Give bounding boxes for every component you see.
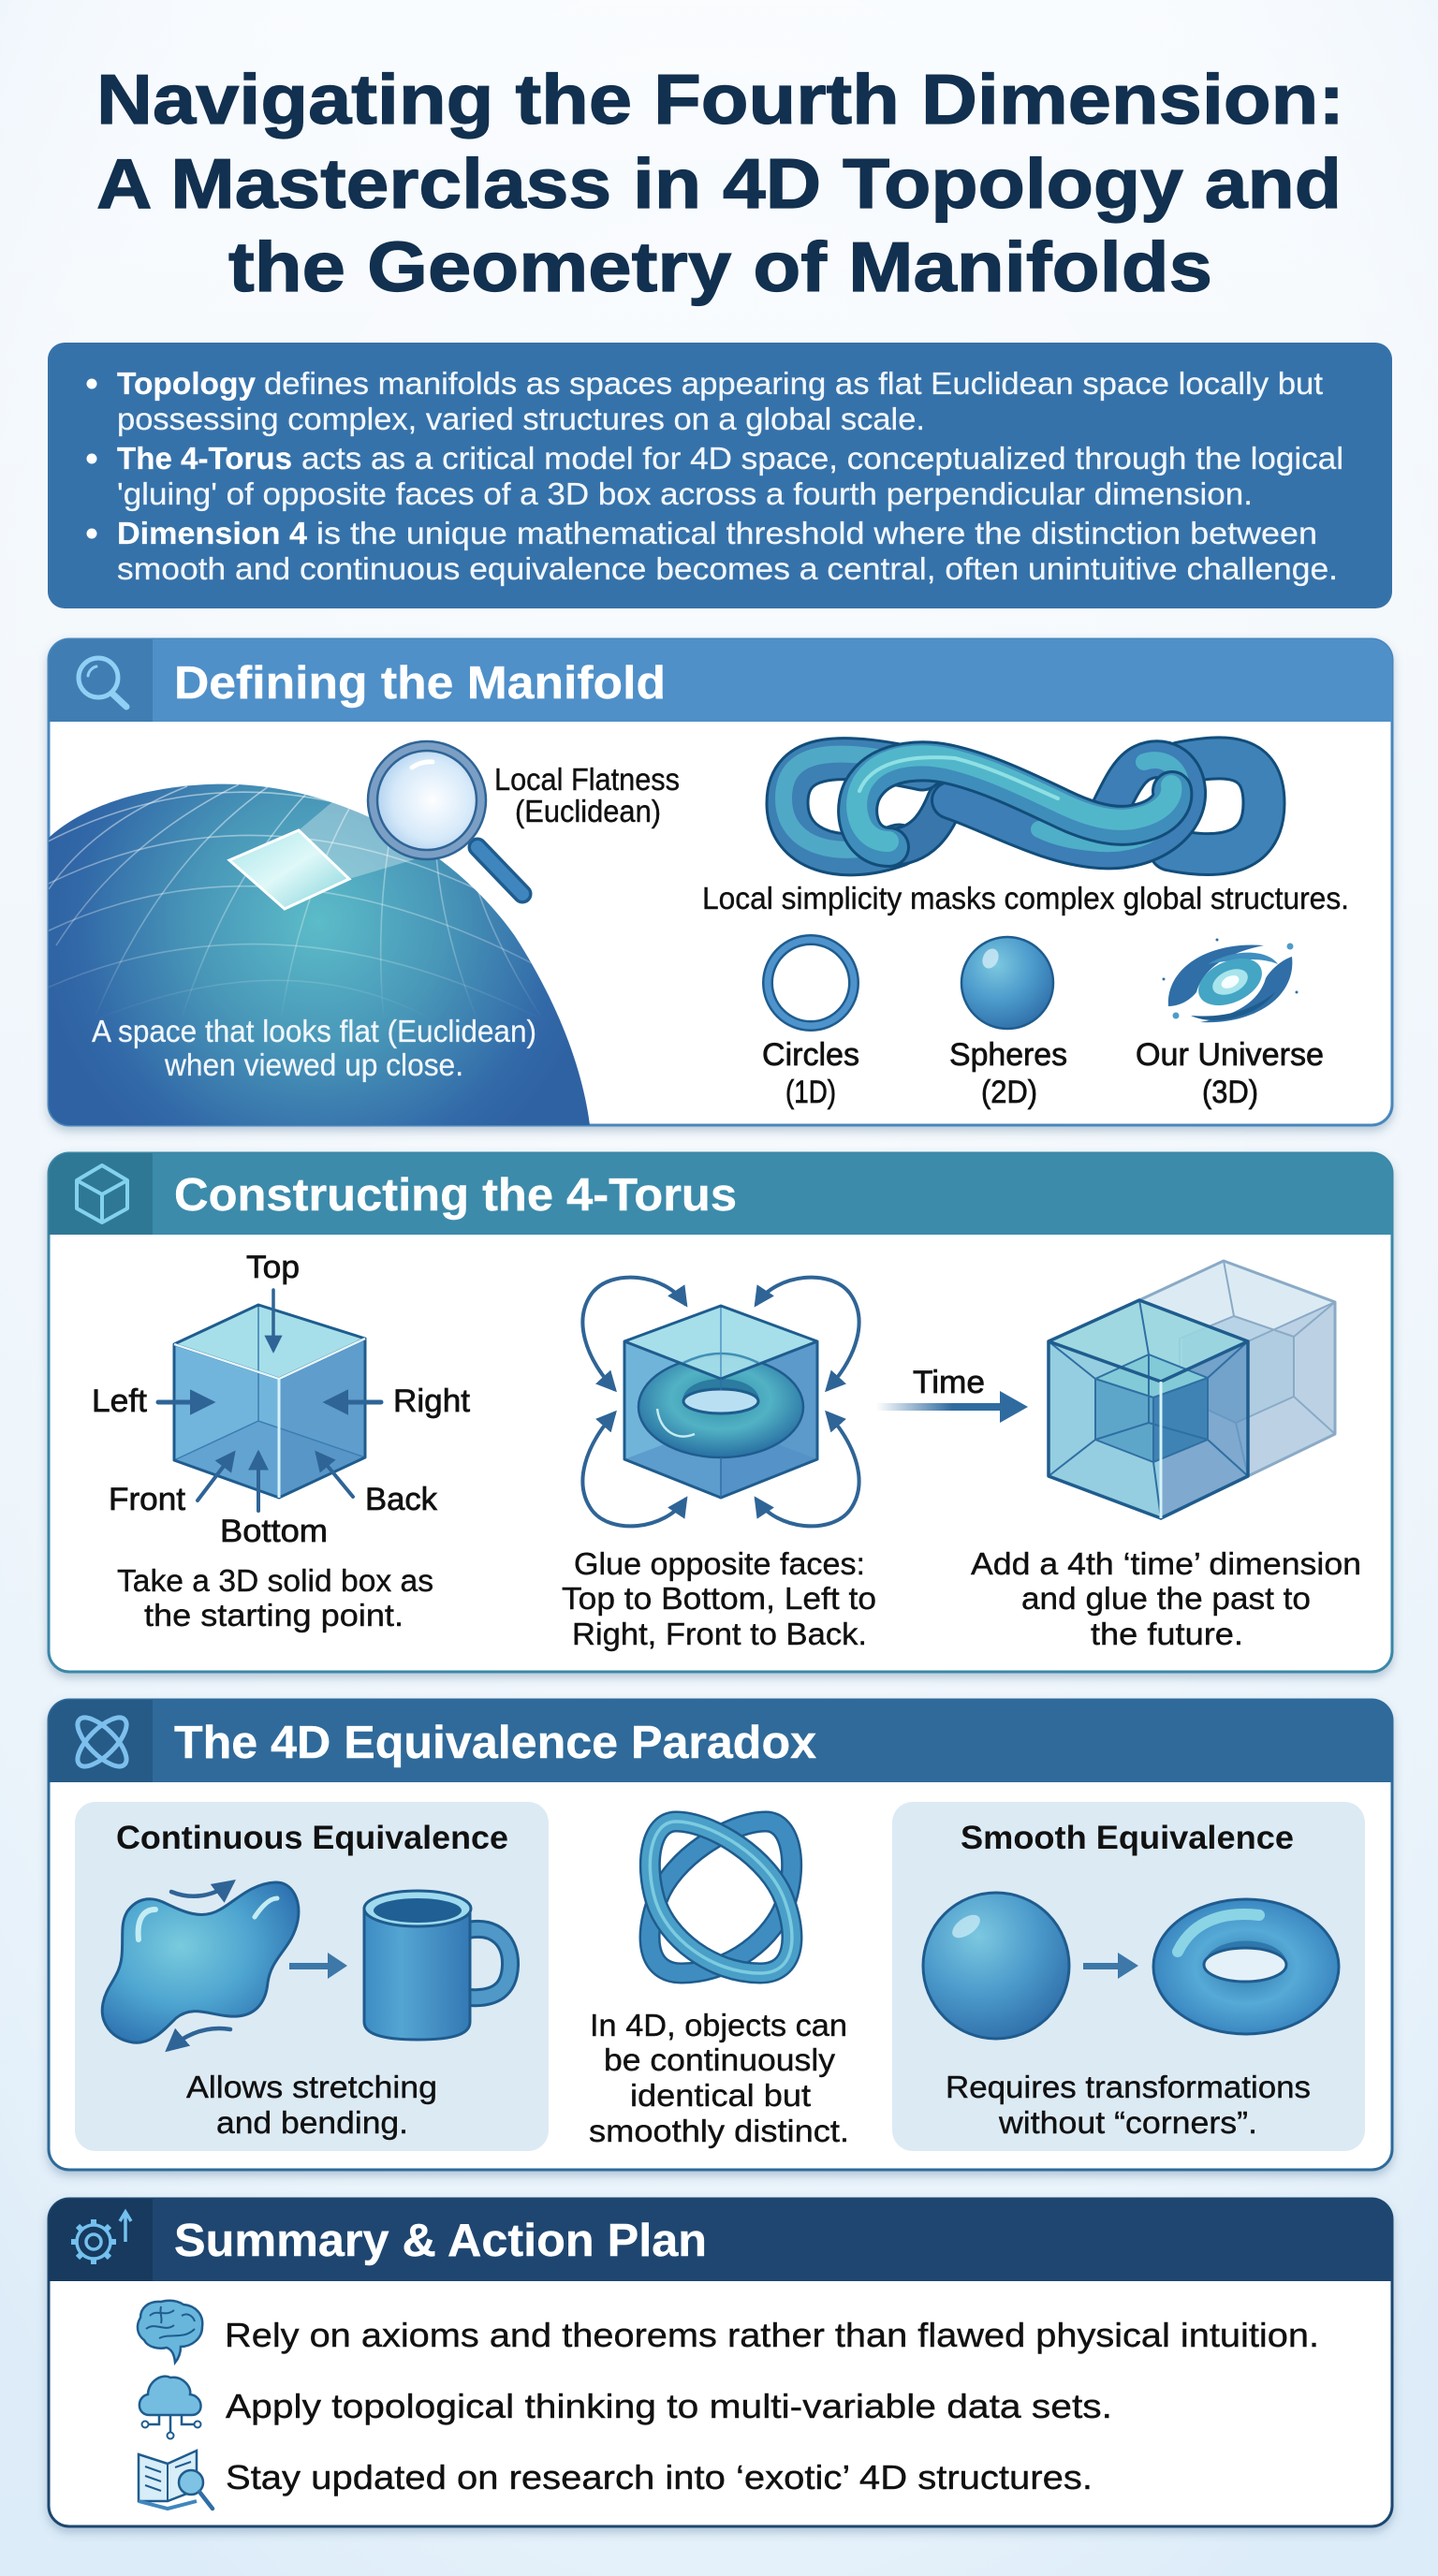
- caption: step 1: Take a 3D solid box as: [117, 1563, 433, 1598]
- section header: paradox: [49, 1700, 1392, 1782]
- label: local flatness: Local Flatness: [494, 762, 680, 797]
- caption: step 2: Glue opposite faces:: [574, 1546, 865, 1581]
- label: local flatness: (Euclidean): [515, 794, 661, 828]
- caption: step 1: [117, 1563, 433, 1632]
- panel: key takeaways summary: [48, 343, 1392, 608]
- icon: circle: [768, 940, 854, 1026]
- section header: constructing: Constructing the 4-Torus: [174, 1170, 737, 1221]
- illustration: 3D box with face labels: Right: [393, 1383, 471, 1419]
- mug: [364, 1891, 510, 2040]
- sub-panel: smooth equivalence: Requires transformations: [946, 2070, 1311, 2104]
- caption: local simplicity: Local simplicity masks complex global structures.: [702, 881, 1349, 915]
- caption: step 1: the starting point.: [144, 1598, 404, 1632]
- panel: defining the manifold: [37, 639, 1392, 1125]
- caption: step 3: and glue the past to: [1021, 1581, 1311, 1616]
- section header: defining the manifold: [49, 639, 1392, 722]
- bullet: topology: possessing complex, varied structures on a global scale.: [117, 402, 925, 436]
- icon: gear with arrow: [71, 2212, 131, 2264]
- magnifying glass: [368, 741, 522, 894]
- title: Navigating the Fourth Dimension:: [96, 60, 1344, 139]
- panel: the 4D equivalence paradox: [49, 1700, 1392, 2170]
- arrow: [289, 1953, 347, 1979]
- row: research: [139, 2451, 1093, 2509]
- arrow: time: [876, 1365, 1028, 1423]
- panel: summary and action plan: [49, 2199, 1392, 2526]
- section header: defining the manifold: Defining the Manifold: [174, 658, 666, 709]
- illustration: tesseract: [1049, 1261, 1335, 1518]
- bullet: dimension 4: smooth and continuous equivalence becomes a central, often unintuitive challenge.: [117, 551, 1338, 586]
- illustration: 3D box with face labels: Bottom: [220, 1514, 328, 1549]
- ghost cube: [1139, 1261, 1335, 1476]
- torus: [638, 1356, 803, 1457]
- icon: sphere: [961, 937, 1053, 1029]
- front cube: [1049, 1300, 1248, 1518]
- icon: knot: [70, 1710, 134, 1774]
- title: [96, 60, 1344, 306]
- labels: circles, spheres, universe: Spheres: [949, 1037, 1067, 1073]
- caption: step 3: Add a 4th ‘time’ dimension: [971, 1546, 1361, 1581]
- sphere: [923, 1893, 1069, 2039]
- row: data sets: [139, 2377, 1112, 2439]
- icon: cloud network: [139, 2377, 201, 2439]
- icon: magnifier: [79, 658, 126, 707]
- bullet: dimension 4: Dimension 4: [117, 516, 308, 550]
- light beam: [299, 760, 477, 879]
- caption: A space that looks flat (Euclidean): [92, 1014, 536, 1048]
- sub-panel: continuous equivalence: Allows stretching: [186, 2070, 437, 2104]
- curved gluing arrows: [582, 1278, 859, 1526]
- section header: summary: Summary & Action Plan: [174, 2216, 707, 2266]
- illustration: box with torus and gluing arrows: [582, 1278, 859, 1526]
- bullet: topology: defines manifolds as spaces appearing as flat Euclidean space locally but: [264, 366, 1323, 401]
- sub-panel: continuous equivalence: Continuous Equivalence: [116, 1820, 508, 1856]
- face labels: Top: [246, 1250, 300, 1285]
- caption: centre statement: [589, 2008, 849, 2148]
- arrow: time: Time: [913, 1365, 985, 1400]
- row: data sets: Apply topological thinking to multi-variable data sets.: [226, 2387, 1112, 2425]
- sub-panel: smooth equivalence: Smooth Equivalence: [961, 1820, 1294, 1856]
- illustration: 3D box with face labels: [92, 1250, 471, 1549]
- caption: step 2: Top to Bottom, Left to: [562, 1581, 876, 1616]
- illustration: knotted manifold tube: [784, 754, 1264, 855]
- sub-panel: continuous equivalence: and bending.: [216, 2105, 408, 2140]
- section header: paradox: The 4D Equivalence Paradox: [174, 1718, 816, 1768]
- caption: centre statement: smoothly distinct.: [589, 2114, 849, 2148]
- row: axioms: Rely on axioms and theorems rather than flawed physical intuition.: [225, 2316, 1319, 2354]
- bullet: 4-torus: [86, 441, 1343, 511]
- caption: step 3: [971, 1546, 1361, 1651]
- caption: centre statement: be continuously: [604, 2042, 836, 2077]
- sub-panel: smooth equivalence: [892, 1802, 1365, 2151]
- illustration: curved manifold with magnifier: [37, 741, 590, 1125]
- bullet: topology: [86, 366, 1323, 436]
- section header: constructing: [49, 1153, 1392, 1235]
- illustration: 3D box with face labels: Front: [109, 1482, 186, 1517]
- bullet: 4-torus: 'gluing' of opposite faces of a 3D box across a fourth perpendicular dimension.: [117, 476, 1253, 511]
- illustration: 3D box with face labels: Left: [92, 1383, 148, 1419]
- sub-panel: smooth equivalence: without “corners”.: [998, 2105, 1257, 2140]
- illustration: 3D box with face labels: Back: [365, 1482, 438, 1517]
- illustration: curved manifold with magnifier: when viewed up close.: [164, 1047, 463, 1082]
- labels: circles, spheres, universe: (2D): [981, 1075, 1037, 1110]
- row: axioms: [138, 2301, 1319, 2363]
- section header: summary: [49, 2199, 1392, 2281]
- caption: centre statement: identical but: [630, 2078, 811, 2113]
- arrow: [1083, 1953, 1138, 1979]
- labels: circles, spheres, universe: (1D): [785, 1075, 836, 1110]
- title: A Masterclass in 4D Topology and: [96, 144, 1342, 223]
- title: the Geometry of Manifolds: [228, 227, 1212, 306]
- stretch arrows: [169, 1882, 232, 2049]
- bullet: topology: Topology: [117, 366, 257, 401]
- illustration: interlocked knot: [650, 1822, 792, 1973]
- labels: circles, spheres, universe: Our Universe: [1136, 1037, 1324, 1073]
- icon: galaxy: [1163, 938, 1298, 1022]
- torus: [1153, 1899, 1339, 2034]
- labels: circles, spheres, universe: (3D): [1202, 1075, 1258, 1110]
- flat patch: [229, 830, 349, 909]
- icon: book with magnifier: [139, 2451, 213, 2509]
- bullet: 4-torus: acts as a critical model for 4D space, conceptualized through the logical: [301, 441, 1343, 476]
- bullet: dimension 4: is the unique mathematical threshold where the distinction between: [316, 516, 1317, 550]
- labels: circles, spheres, universe: [762, 1037, 1324, 1110]
- blob: [102, 1882, 299, 2042]
- caption: step 2: [562, 1546, 876, 1651]
- icon: cube: [77, 1165, 127, 1222]
- sub-panel: continuous equivalence: [75, 1802, 549, 2151]
- panel: constructing the 4-torus: [49, 1153, 1392, 1672]
- icon: brain: [138, 2301, 202, 2363]
- caption: step 2: Right, Front to Back.: [572, 1617, 867, 1651]
- bullet: dimension 4: [86, 516, 1338, 586]
- label: local flatness: [494, 762, 680, 828]
- arrows to faces: [158, 1290, 381, 1511]
- caption: step 3: the future.: [1091, 1617, 1243, 1651]
- labels: circles, spheres, universe: Circles: [762, 1037, 859, 1073]
- bullet: 4-torus: The 4-Torus: [117, 441, 292, 476]
- caption: centre statement: In 4D, objects can: [590, 2008, 847, 2042]
- row: research: Stay updated on research into ‘exotic’ 4D structures.: [226, 2458, 1093, 2496]
